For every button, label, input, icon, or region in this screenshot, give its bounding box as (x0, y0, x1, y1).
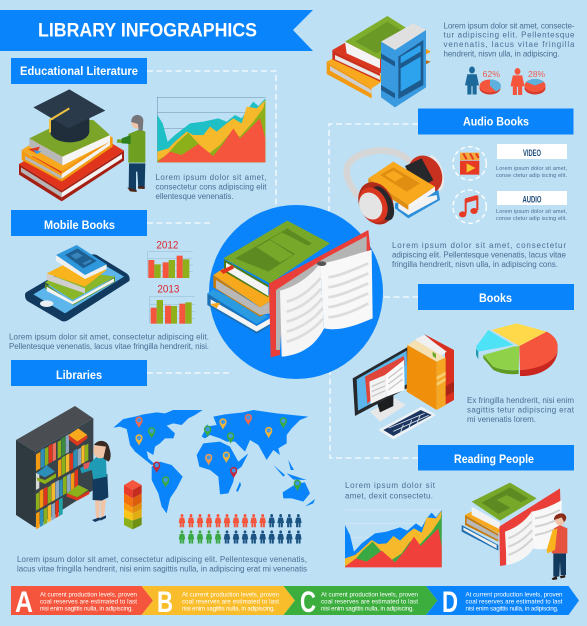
step D: coal reserves are estimated to last (466, 598, 563, 606)
world map with location pins (113, 410, 315, 513)
step B: nisi enim sagittis nulla, in adipiscing. (182, 606, 275, 612)
text: audio books: fringilla hendrerit, nisvn ulla, in adipiscing cons. (392, 260, 558, 269)
heading: Educational Literature: Educational Literature (20, 66, 138, 78)
chart: bar chart 2013 (149, 284, 195, 324)
text: audio books (392, 241, 567, 269)
step A: nisi enim sagittis nulla, in adipiscing. (40, 606, 133, 612)
step B: At current production levels, proven (182, 592, 280, 598)
center circle (209, 205, 383, 379)
step C: coal reserves are estimated to last (321, 598, 418, 606)
text: books (467, 396, 575, 424)
step D: D (442, 586, 458, 619)
step D: At current production levels, proven (466, 592, 563, 598)
heading: Mobile Books: Mobile Books (44, 220, 115, 232)
figure: woman at bookcase (80, 441, 111, 522)
step B (142, 586, 295, 619)
title banner: LIBRARY INFOGRAPHICS (38, 20, 257, 42)
illustration: reading person with books (462, 483, 567, 580)
step D: nisi enim sagittis nulla, in adipiscing. (466, 606, 559, 612)
text: top right: venenatis, lacus vitae fringilla (444, 40, 575, 49)
step C: nisi enim sagittis nulla, in adipiscing. (321, 606, 414, 612)
step C (284, 586, 438, 619)
text: mobile books: Lorem ipsum dolor sit amet, consectetur adipiscing elit. (9, 332, 209, 342)
icon: video clapper (453, 147, 486, 180)
illustration: headphones with books (347, 150, 449, 230)
text: educational literature: Lorem ipsum dolor sit amet, (156, 173, 266, 182)
illustration: computer with books (353, 334, 454, 439)
text: reading people (345, 481, 436, 500)
label: audio: conse ctetur adip iscing elit. (496, 216, 567, 222)
text: mobile books (9, 332, 209, 351)
heading: Books: Books (479, 293, 512, 305)
chart: stacked block (124, 480, 142, 529)
text: libraries (17, 555, 307, 574)
heading: Books (418, 284, 574, 310)
text: top right (444, 22, 575, 58)
text: books: mi venenatis lorem. (467, 415, 536, 424)
illustration: bookcase (16, 406, 93, 529)
stat: 62% women: 62% (482, 70, 500, 79)
heading: Reading People: Reading People (454, 454, 534, 466)
step A: coal reserves are estimated to last (40, 598, 137, 606)
text: books: sagittis tetur adipiscing erat (467, 406, 575, 414)
text: libraries: lacus vitae fringilla hendrerit, nisi enim sagittis nulla, in adipiscing erat mi venenatis (17, 564, 307, 574)
pictogram: people rows (179, 514, 302, 544)
stat: 62% women (465, 66, 501, 94)
label: audio (496, 191, 567, 222)
heading: Educational Literature (11, 58, 147, 84)
text: reading people: amet, dexit consectetu. (345, 492, 433, 500)
text: books: Ex fringilla hendrerit, nisi enim (467, 396, 574, 405)
label: video: Lorem ipsum dolor sit amet, (496, 166, 567, 172)
label: video: VIDEO (523, 148, 541, 158)
heading: Libraries (11, 360, 147, 386)
heading: Reading People (418, 445, 574, 470)
step C: C (300, 586, 316, 619)
step D (426, 586, 579, 619)
step C: At current production levels, proven (321, 592, 419, 598)
label: audio: AUDIO (522, 194, 542, 204)
step A: A (15, 586, 33, 619)
book spines on shelves (36, 423, 88, 529)
text: libraries: Lorem ipsum dolor sit amet, consectetur adipiscing elit. Pellentesque venenatis, (17, 555, 307, 564)
text: educational literature (156, 173, 267, 201)
heading: Audio Books (418, 108, 574, 134)
text: educational literature: ellentesque venenatis. (156, 192, 234, 201)
text: top right: tur adipiscing elit. Pellentesque (444, 30, 575, 40)
icon: music note (453, 190, 486, 223)
chart: bar chart 2012 (148, 240, 193, 278)
step A (11, 586, 153, 619)
stat: 28% men: 28% (528, 70, 545, 79)
title banner (0, 10, 313, 51)
text: educational literature: consectetur cons adipiscing elit (156, 182, 267, 192)
text: top right: hendrerit, nisvn ulla, in adipiscing. (444, 50, 560, 58)
label: video: conse ctetur adip iscing elit. (496, 173, 567, 179)
heading: Libraries: Libraries (56, 370, 102, 382)
heading: Mobile Books (11, 210, 147, 236)
stat: 28% men (510, 68, 546, 95)
chart: area chart reading people (345, 510, 442, 567)
text: reading people: Lorem ipsum dolor sit (345, 481, 436, 490)
step B: B (157, 586, 173, 619)
text: mobile books: Pellentesque venenatis, lacus vitae fringilla hendrerit, nisi. (9, 342, 209, 351)
label: video (496, 144, 567, 179)
step A: At current production levels, proven (40, 592, 138, 598)
text: audio books: adipiscing elit. Pellentesque venenatis, lacus vitae (392, 250, 567, 260)
illustration: phone with books (25, 245, 130, 321)
illustration: stacked books with blue book (327, 16, 431, 107)
illustration: central books with open book (207, 221, 373, 357)
chart: area chart educational (157, 97, 265, 162)
step B: coal reserves are estimated to last (182, 598, 279, 606)
label: audio: Lorem ipsum dolor sit amet, (496, 209, 567, 215)
chart: bar chart 2013: 2013 (157, 284, 179, 296)
illustration: books with graduation cap and student (19, 89, 145, 201)
text: audio books: Lorem ipsum dolor sit amet, consectetur (392, 241, 566, 250)
chart: 3D pie chart (476, 323, 558, 376)
chart: bar chart 2012: 2012 (156, 240, 178, 252)
text: top right: Lorem ipsum dolor sit amet, consecte- (444, 22, 575, 30)
heading: Audio Books: Audio Books (463, 116, 529, 128)
